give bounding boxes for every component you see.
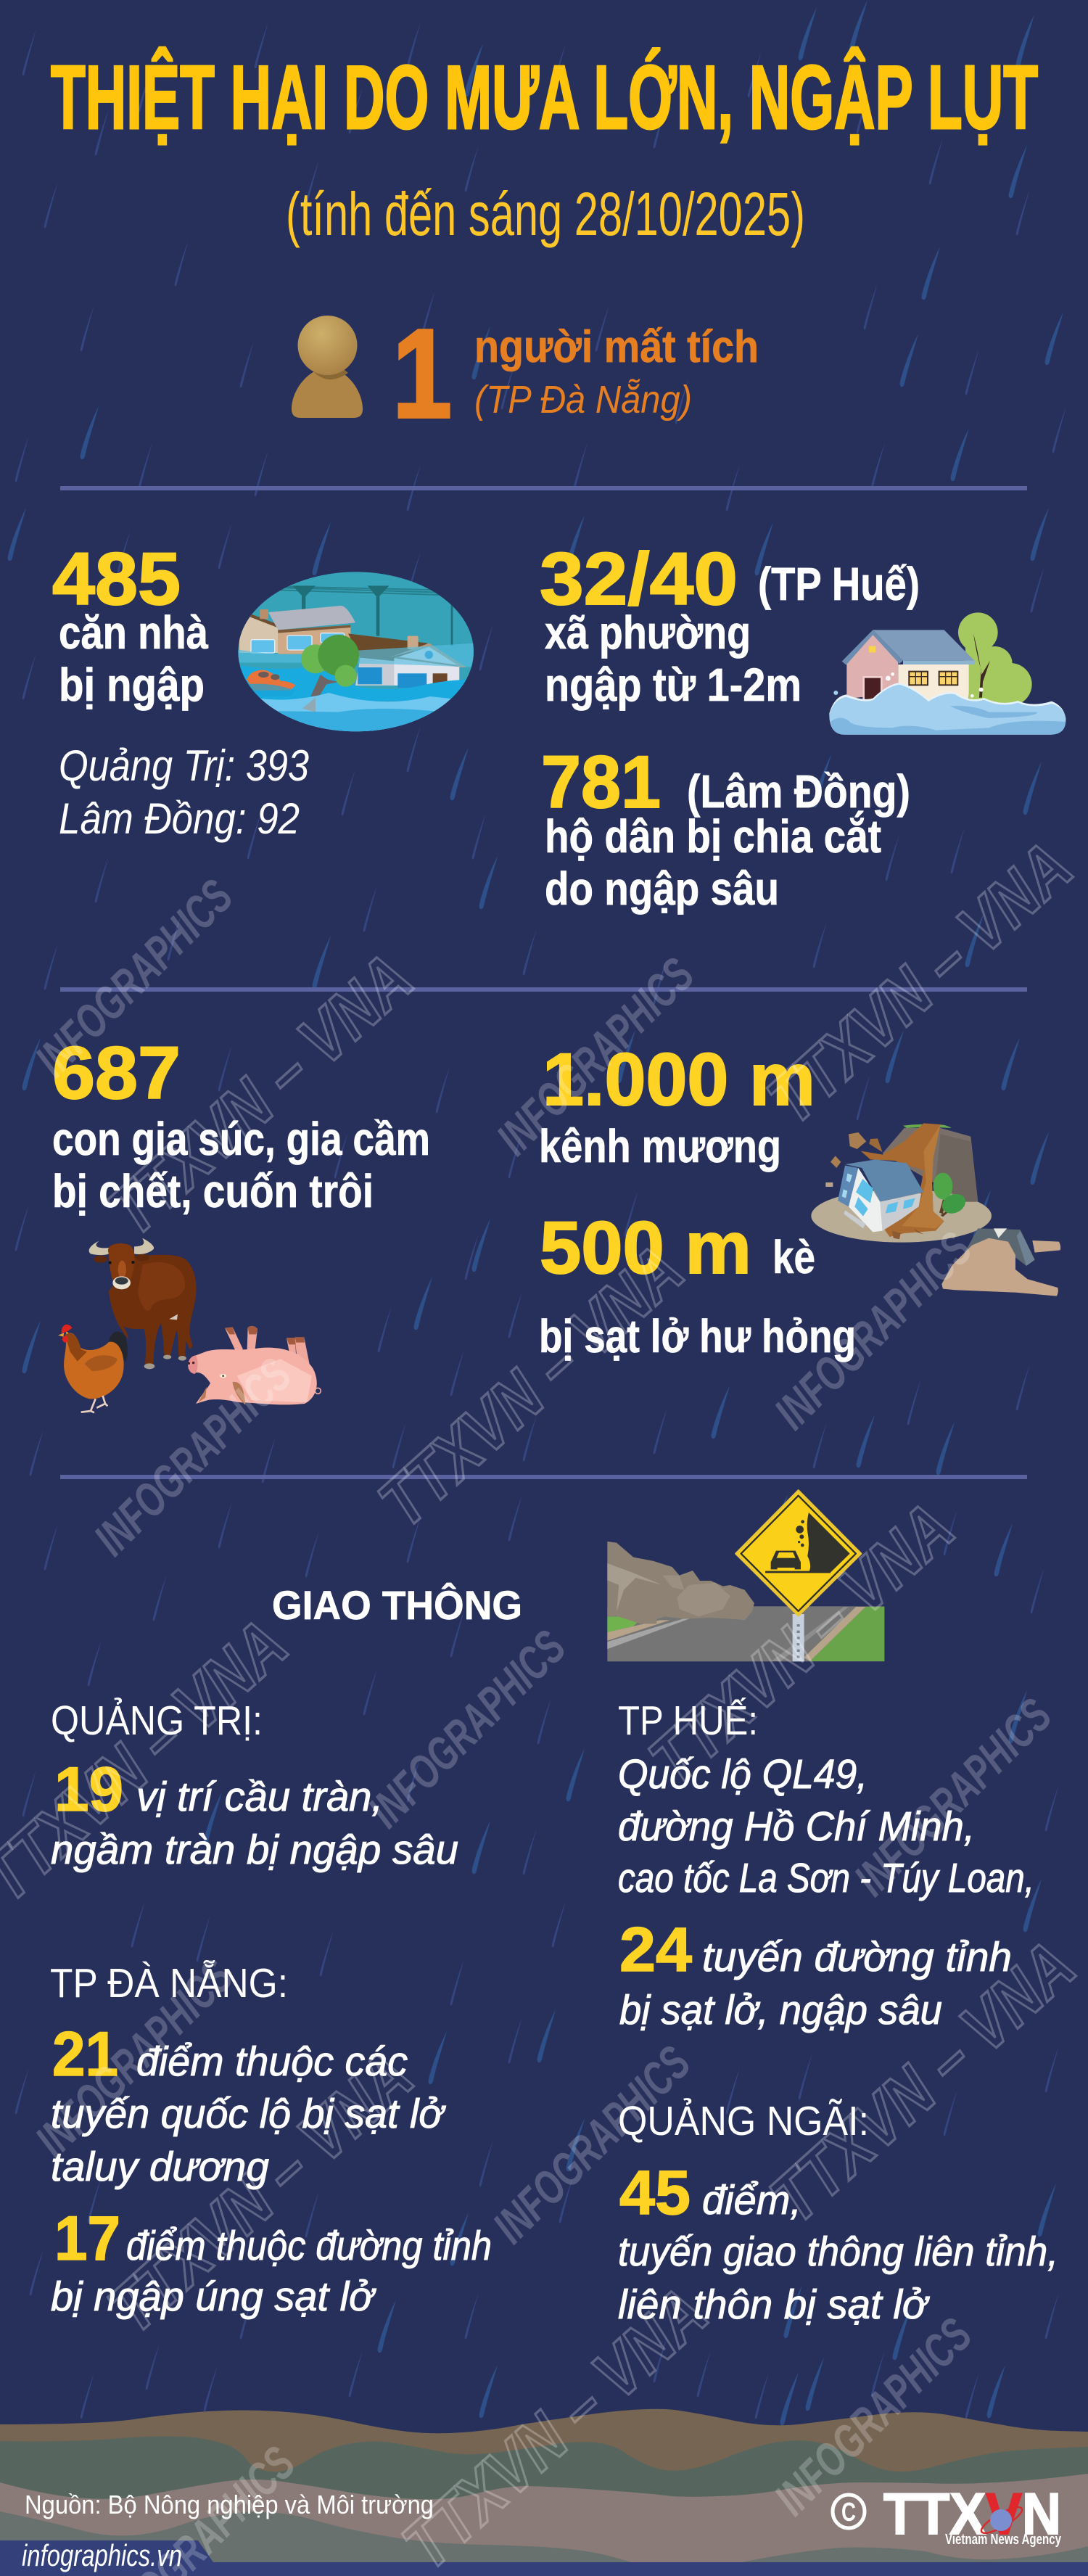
label line 2: do ngập sâu (545, 863, 779, 915)
number 32/40: 32/40 (540, 538, 738, 620)
stat: 687 livestock (52, 1032, 430, 1217)
text line: điểm thuộc các (136, 2038, 408, 2085)
icon: flooded houses (238, 572, 474, 731)
breakdown Lam Dong: Lâm Đồng: 92 (59, 794, 300, 843)
missing person block (292, 303, 759, 444)
label line 2: ngập từ 1-2m (545, 659, 801, 711)
chicken (58, 1325, 128, 1412)
stat: 781 households (541, 741, 910, 915)
number 19: 19 (54, 1755, 123, 1824)
footer wave: grey-green (0, 2511, 1088, 2576)
section heading: traffic: GIAO THÔNG (272, 1582, 522, 1628)
watermarks: INFOGRAPHICS (765, 2308, 981, 2525)
footer wave: brown (0, 2409, 1088, 2576)
logo: TTXVN (833, 2482, 1062, 2548)
location: (TP Huế) (758, 558, 920, 610)
watermarks: INFOGRAPHICS (84, 1348, 301, 1565)
icon: globe (978, 2503, 1025, 2538)
breakdown Quang Tri: Quảng Trị: 393 (59, 741, 309, 790)
icon: house in flood (829, 612, 1066, 735)
region: Quang Tri (51, 1697, 458, 1873)
label: căn nhà (59, 606, 208, 659)
number 45: 45 (619, 2158, 691, 2228)
text line 5: bị ngập úng sạt lở (51, 2273, 376, 2320)
watermarks: TTXVN – VNA (388, 2273, 722, 2576)
text line 5: bị sạt lở, ngập sâu (619, 1987, 942, 2033)
number 1: 1 (392, 303, 452, 444)
label damage: bị sạt lở hư hỏng (539, 1310, 856, 1362)
watermarks: TTXVN – VNA (635, 1489, 968, 1800)
icon: road with falling-rocks sign (607, 1491, 884, 1661)
footer wave: green (0, 2436, 1088, 2576)
label canals: kênh mương (539, 1120, 781, 1172)
cow (89, 1238, 197, 1369)
watermarks: INFOGRAPHICS (25, 1949, 242, 2167)
website: infographics.vn (22, 2538, 182, 2572)
watermarks: INFOGRAPHICS (487, 947, 704, 1165)
location: (Lâm Đồng) (687, 765, 910, 818)
footer blue bar with tab (0, 2540, 1088, 2576)
region heading: TP HUẾ: (618, 1697, 758, 1744)
footer wave: mauve (0, 2474, 1088, 2576)
region: Quang Ngai (618, 2097, 1058, 2328)
missing person label: người mất tích (474, 322, 759, 372)
number 485: 485 (52, 538, 181, 620)
region: Da Nang (50, 1959, 492, 2320)
stat: 1.000 m canals, 500 m embankment (539, 1038, 856, 1362)
region: Hue (618, 1697, 1034, 2033)
label line 2: bị ngập (59, 659, 205, 711)
text line 4: điểm thuộc đường tỉnh (126, 2223, 492, 2269)
label: xã phường (545, 606, 751, 659)
label: hộ dân bị chia cắt (545, 810, 881, 863)
watermarks: INFOGRAPHICS (358, 1620, 575, 1838)
text line: vị trí cầu tràn, (136, 1774, 383, 1820)
text line 2: tuyến giao thông liên tỉnh, (618, 2229, 1058, 2275)
icon: copyright: C (841, 2497, 856, 2527)
broken road piece (941, 1228, 1060, 1296)
number 1.000 m: 1.000 m (543, 1038, 815, 1121)
subtitle: (tính đến sáng 28/10/2025) (286, 180, 805, 248)
location label: (TP Đà Nẵng) (474, 378, 692, 421)
text line 3: taluy dương (51, 2144, 269, 2190)
text line 2: đường Hồ Chí Minh, (618, 1803, 975, 1850)
region heading: QUẢNG NGÃI: (618, 2097, 869, 2144)
number 500 m: 500 m (540, 1206, 751, 1289)
number 687: 687 (52, 1032, 181, 1114)
number 17: 17 (54, 2204, 120, 2273)
label embankment: kè (772, 1231, 815, 1283)
pig (188, 1326, 321, 1405)
region heading: QUẢNG TRỊ: (51, 1697, 263, 1744)
text line: điểm, (702, 2177, 801, 2223)
label: con gia súc, gia cầm (52, 1113, 430, 1165)
watermarks: TTXVN – VNA (364, 1231, 698, 1542)
watermarks: TTXVN – VNA (94, 939, 427, 1251)
watermarks: INFOGRAPHICS (25, 869, 242, 1087)
icon: person (292, 316, 363, 418)
number 21: 21 (52, 2020, 118, 2089)
number 781: 781 (541, 741, 661, 823)
text line: Quốc lộ QL49, (618, 1751, 867, 1798)
icon: copyright (833, 2495, 865, 2528)
text line 3: liên thôn bị sạt lở (618, 2281, 930, 2328)
wordmark: TTXVN (883, 2482, 1061, 2547)
watermarks: TTXVN – VNA (94, 2037, 427, 2348)
divider 2 (60, 987, 1027, 992)
watermarks: INFOGRAPHICS (765, 1222, 981, 1439)
text line 2: tuyến quốc lộ bị sạt lở (51, 2091, 446, 2137)
label line 2: bị chết, cuốn trôi (52, 1165, 374, 1217)
region heading: TP ĐÀ NẴNG: (50, 1959, 288, 2007)
source: Nguồn: Bộ Nông nghiệp và Môi trường (25, 2490, 434, 2519)
icon: cow, chicken, pig (58, 1238, 321, 1412)
watermarks: INFOGRAPHICS (483, 2036, 700, 2253)
divider 1 (60, 486, 1027, 490)
text line 2: ngầm tràn bị ngập sâu (51, 1827, 458, 1873)
divider 3 (60, 1475, 1027, 1479)
text line 4: tuyến đường tỉnh (702, 1934, 1012, 1980)
watermarks (0, 828, 1088, 2576)
stat: 32/40 communes (540, 538, 920, 711)
stat: 485 houses flooded (52, 538, 309, 843)
icon: landslide and broken road (811, 1123, 1060, 1296)
number 24: 24 (619, 1915, 692, 1985)
